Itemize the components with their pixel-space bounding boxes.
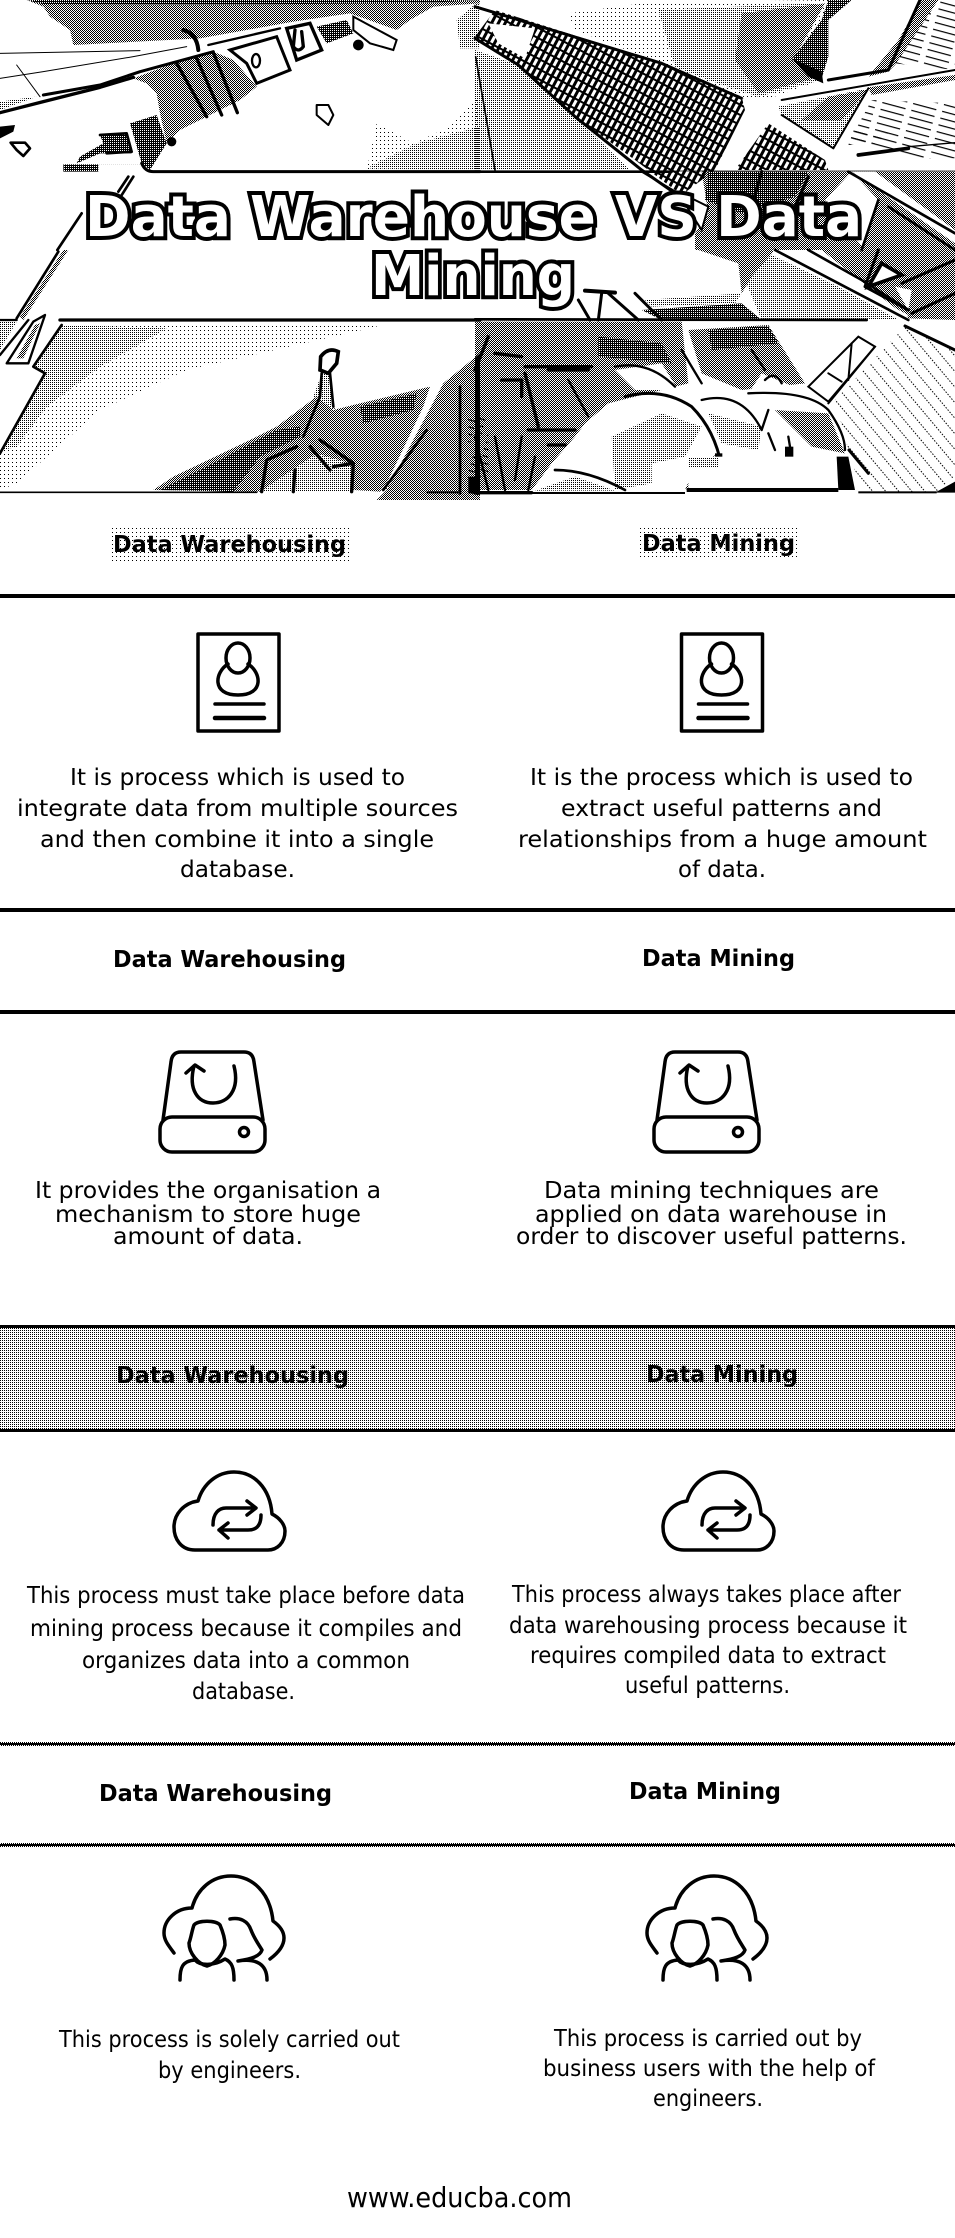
text: mining description 1: extract useful patterns and [561,796,882,822]
hero bottom-left: sky and tower [0,250,480,500]
text: warehousing description 3: mining process because it compiles and [30,1616,462,1642]
text: mining description 3: This process always takes place after [511,1582,901,1608]
panel: row 3 heading band [0,1325,955,1432]
icon: cloud sync, right [663,1472,774,1550]
text: warehousing description 1: integrate data from multiple sources [17,796,458,822]
heading: Data Mining: Data Mining [629,1779,781,1805]
hero top-right: lattice crane [475,0,955,250]
text: warehousing description 3 [26,1583,465,1705]
panel: row 2 [35,946,907,1250]
panel: row 1 [17,528,927,883]
hero top-left: boom and sky [0,0,480,250]
text: warehousing description 1: It is process which is used to [70,765,405,791]
heading: Data Mining: Data Mining [642,946,795,972]
text: mining description 2: Data mining techniques are [544,1178,879,1204]
text: mining description 4: engineers. [653,2086,763,2112]
text: warehousing description 3: This process must take place before data [26,1583,465,1609]
text: mining description 1 [518,765,927,883]
icon: cloud users, left [164,1876,284,1980]
text: mining description 3: requires compiled data to extract [530,1643,886,1669]
text: warehousing description 4 [58,2027,400,2084]
text: warehousing description 1 [17,765,458,883]
icon: profile document, left [198,634,279,731]
text: warehousing description 2: mechanism to store huge [55,1202,361,1228]
heading: Data Warehousing: Data Warehousing [99,1781,332,1807]
heading: Data Warehousing: Data Warehousing [116,1363,349,1389]
text: warehousing description 3: database. [192,1679,295,1705]
heading: Data Mining: Data Mining [642,531,795,557]
icon: profile document, right [682,634,762,731]
text: warehousing description 3: organizes data into a common [82,1648,410,1674]
text: mining description 3: data warehousing process because it [509,1613,907,1639]
hero bottom-right: machinery, pipes and stripes [475,250,955,494]
hero photo: dithered crane image [0,0,955,500]
text: warehousing description 4: by engineers. [158,2058,301,2084]
icon: cloud users, right [647,1876,767,1980]
panel: row 4 [58,1779,876,2112]
icon: hard drive sync, left [160,1052,265,1152]
title: Data Warehouse VS Data [85,185,862,250]
text: mining description 3: useful patterns. [625,1673,790,1699]
icon: cloud sync, left [174,1472,285,1550]
text: mining description 3 [509,1582,907,1699]
text: mining description 1: It is the process which is used to [530,765,913,791]
text: mining description 2 [516,1178,907,1250]
text: mining description 4 [543,2026,876,2112]
text: mining description 4: business users with the help of [543,2056,876,2082]
text: warehousing description 2: It provides the organisation a [35,1178,381,1204]
panel: row 3 [26,1472,907,1705]
text: warehousing description 1: database. [180,857,295,883]
footer: website: www.educba.com [347,2181,572,2214]
dither halo behind row 1 headings [112,528,800,562]
title [85,185,862,309]
icon: hard drive sync, right [654,1052,759,1152]
text: mining description 1: of data. [678,857,766,883]
text: mining description 2: applied on data warehouse in [535,1202,887,1228]
title: Mining [371,244,575,309]
text: warehousing description 2 [35,1178,381,1250]
text: warehousing description 2: amount of data. [113,1224,303,1250]
text: mining description 2: order to discover useful patterns. [516,1224,907,1250]
text: warehousing description 1: and then combine it into a single [40,827,434,853]
text: mining description 4: This process is carried out by [553,2026,862,2052]
heading: Data Warehousing: Data Warehousing [113,532,346,558]
heading: Data Warehousing: Data Warehousing [113,947,346,973]
text: mining description 1: relationships from a huge amount [518,827,927,853]
heading: Data Mining: Data Mining [646,1362,798,1388]
text: warehousing description 4: This process is solely carried out [58,2027,400,2053]
